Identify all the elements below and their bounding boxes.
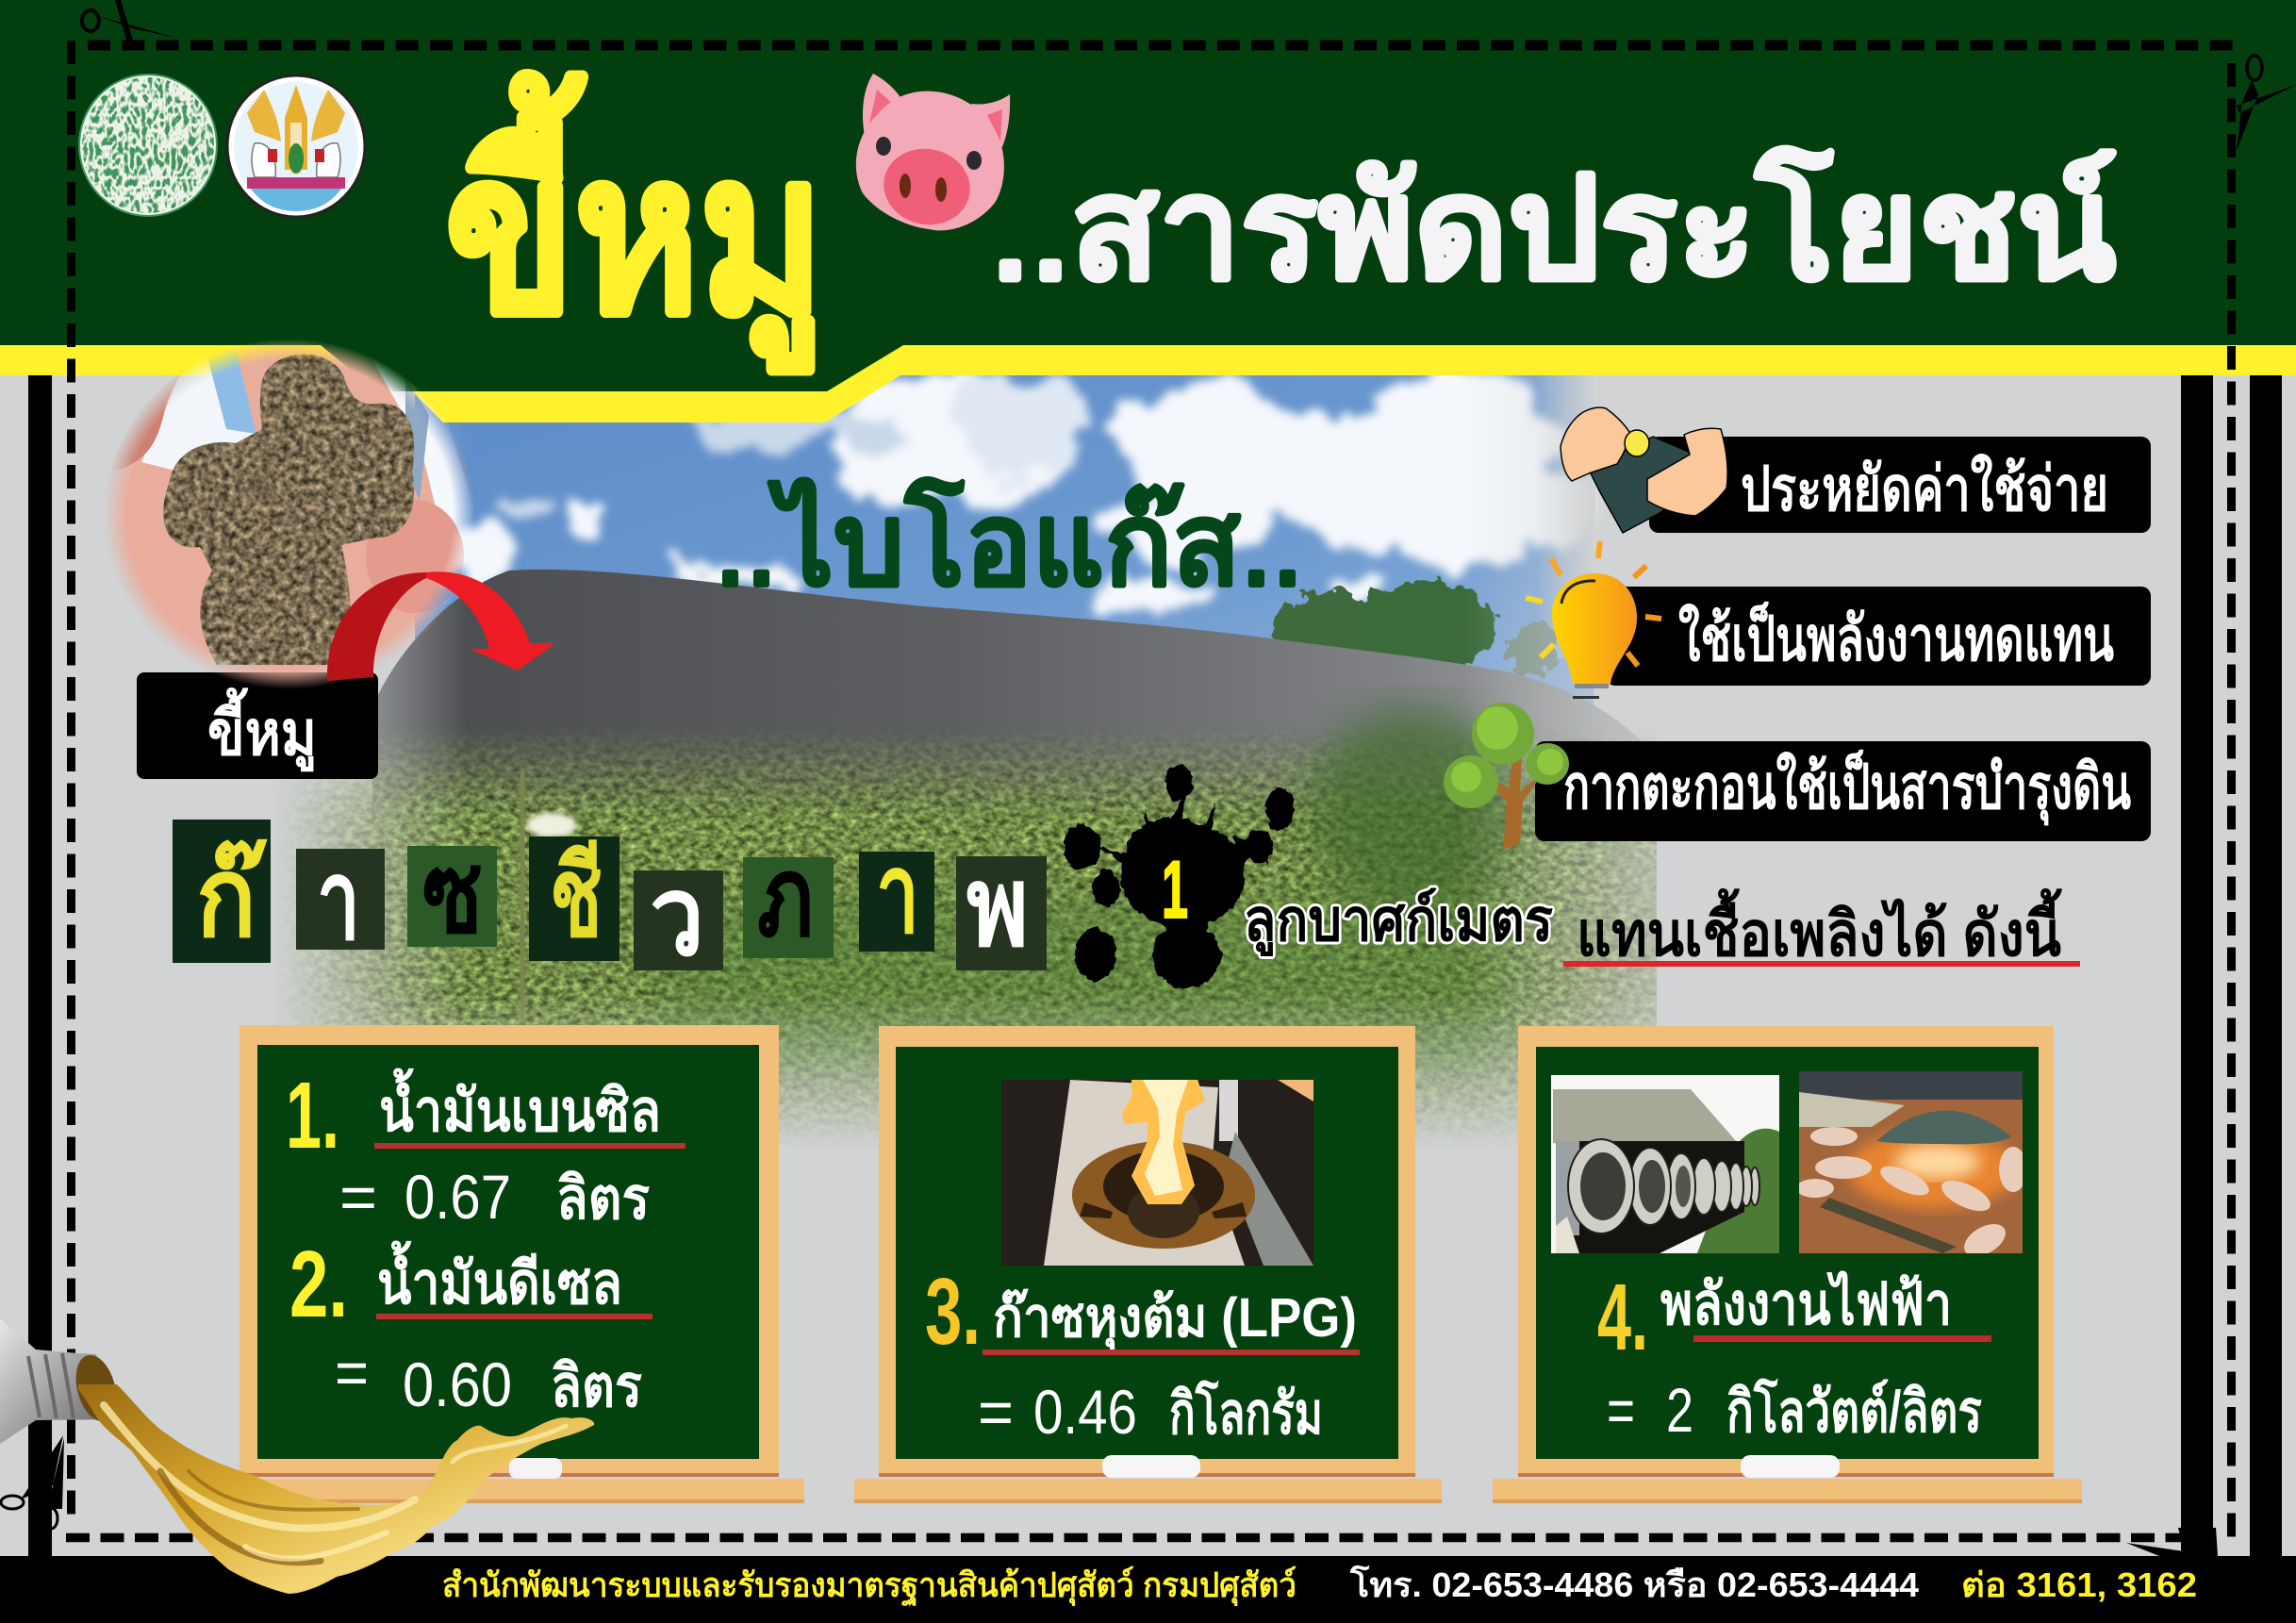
benefit: alternative energy <box>1526 541 2151 699</box>
photo: farm fans <box>1551 1075 1779 1253</box>
tile ภ: ภ <box>757 836 814 960</box>
pill <box>1535 741 2151 841</box>
tile ซ: ซ <box>422 832 483 956</box>
board <box>896 1047 1398 1459</box>
lower grass tone <box>660 896 1509 1085</box>
benefit: save costs <box>1561 407 2151 533</box>
head <box>856 91 1004 230</box>
eyes <box>876 137 891 156</box>
value 2 kW: กิโลวัตต์/ลิตร <box>1726 1377 1982 1445</box>
gasoline: น้ำมันเบนซิล <box>379 1068 661 1144</box>
title: สารพัดประโยชน์: ..สารพัดประโยชน์ <box>990 149 2116 309</box>
sky right fade <box>1544 375 1595 658</box>
value 0.46 <box>978 1377 1323 1447</box>
number 2: 2. <box>289 1232 348 1337</box>
bushes <box>1311 707 1518 915</box>
icon: scissors bottom-right <box>2126 1528 2218 1556</box>
number 1: 1. <box>286 1063 339 1168</box>
value 0.60: 0.60 <box>403 1350 512 1419</box>
LPG label: ก๊าซหุงต้ม (LPG) <box>993 1287 1357 1352</box>
value 0.67: ลิตร <box>556 1167 650 1232</box>
icon: pig face <box>856 74 1010 233</box>
tile พ: พ <box>966 845 1029 969</box>
number: 1 <box>1162 845 1188 936</box>
frame <box>879 1026 1415 1477</box>
number 3: 3. <box>925 1259 981 1365</box>
bottle mouth <box>69 1350 124 1426</box>
value 0.67 <box>339 1162 650 1232</box>
pill <box>1649 437 2151 533</box>
underline <box>374 1143 685 1149</box>
right finger <box>366 500 464 613</box>
phone: โทร. 02-653-4486 หรือ 02-653-4444 <box>1349 1565 1919 1604</box>
chalk <box>1741 1455 1840 1478</box>
tile า: า <box>317 838 360 963</box>
side black bars <box>28 375 2282 1559</box>
seal: livestock department <box>227 75 365 217</box>
text: replaces fuel: แทนเชื้อเพลิงได้ ดังนี้ <box>1577 887 2062 969</box>
board <box>257 1045 759 1459</box>
extension: ต่อ 3161, 3162 <box>1961 1565 2197 1604</box>
photo circle: pig manure in hand <box>104 335 481 689</box>
office name: สำนักพัฒนาระบบและรับรองมาตรฐานสินค้าปศุสัตว์ กรมปศุสัตว์ <box>442 1565 1297 1607</box>
value 0.60: = <box>335 1337 369 1407</box>
oil stream <box>78 1384 594 1594</box>
icon: tree <box>1444 703 1569 849</box>
benefit: soil conditioner <box>1444 703 2151 849</box>
value 0.46: 0.46 <box>1033 1377 1137 1447</box>
chalkboard 1 <box>215 1025 804 1503</box>
trees <box>1275 582 1557 677</box>
value 2 kW: 2 <box>1666 1375 1693 1445</box>
skin <box>104 339 475 689</box>
pill text: ประหยัดค่าใช้จ่าย <box>1741 452 2108 523</box>
background photo: biogas plant under open sky <box>273 373 1657 1151</box>
oil highlights <box>104 1405 566 1563</box>
value 2 kW <box>1607 1375 1982 1445</box>
shelf <box>1493 1479 2082 1503</box>
underline <box>1693 1335 1991 1342</box>
icon: scissors top-left <box>82 0 176 41</box>
left ear <box>863 74 910 141</box>
nostrils <box>900 174 911 198</box>
letter tiles: ก๊าซชีวภาพ <box>173 820 1047 979</box>
flower <box>527 813 576 837</box>
finger shading <box>113 371 185 472</box>
tile ชี: ชี <box>550 836 603 960</box>
frame <box>240 1025 779 1477</box>
chalk <box>509 1458 562 1479</box>
title: ขี้หมู: ขี้หมู <box>445 75 824 370</box>
right ear <box>971 94 1010 156</box>
arrow: red curved <box>327 571 555 681</box>
value 0.60: ลิตร <box>551 1354 642 1419</box>
biogas tank <box>372 570 1641 815</box>
tile ว <box>634 854 723 979</box>
yellow band <box>0 345 2296 422</box>
plant stalk <box>520 769 524 1023</box>
diesel: น้ำมันดีเซล <box>377 1240 622 1317</box>
grass <box>273 726 1657 1151</box>
shelf <box>215 1479 804 1503</box>
subtitle: ไบโอแก๊ส: ..ไบโอแก๊ส.. <box>715 480 1303 610</box>
bottle neck ridges <box>28 1353 74 1418</box>
sky <box>415 375 1594 734</box>
value 0.67: = <box>339 1162 377 1232</box>
green banner <box>0 0 2296 391</box>
icon: scissors bottom-left <box>1 1435 64 1529</box>
value 0.60 <box>335 1337 642 1419</box>
label box: ขี้หมู: ขี้หมู <box>207 687 317 772</box>
value 0.67: 0.67 <box>405 1162 511 1232</box>
shelf <box>854 1479 1442 1503</box>
tile ก๊: ก๊ <box>196 836 268 960</box>
bottle <box>0 1318 117 1444</box>
icon: oil bottle pouring <box>0 1318 594 1594</box>
pill <box>1606 587 2151 686</box>
pill text: ใช้เป็นพลังงานทดแทน <box>1678 601 2114 673</box>
ink splat with number 1 <box>1064 765 1294 988</box>
electricity label: พลังงานไฟฟ้า <box>1660 1270 1952 1337</box>
manure lump <box>163 355 414 665</box>
number 4: 4. <box>1597 1265 1648 1370</box>
board <box>1536 1047 2039 1459</box>
underline <box>983 1350 1360 1355</box>
tile ก๊ <box>173 820 271 963</box>
tile า: า <box>876 832 919 956</box>
rays <box>1526 541 1661 666</box>
chalkboard 3 <box>1493 1026 2082 1503</box>
icon: light bulb <box>1526 541 1661 699</box>
clouds <box>415 373 1594 611</box>
label box: ขี้หมู <box>137 672 378 779</box>
icon: scissors top-right <box>2237 56 2296 151</box>
snout <box>877 141 977 233</box>
tile ว: ว <box>650 854 704 979</box>
value 0.46: กิโลกรัม <box>1169 1379 1323 1447</box>
value 0.46: = <box>978 1377 1014 1447</box>
footer bar <box>0 1556 2296 1623</box>
chalk <box>1102 1455 1200 1478</box>
photo: piglets under heat lamp <box>1796 1071 2027 1263</box>
background top-left <box>141 358 256 470</box>
footer <box>0 1528 2296 1623</box>
icon: hands and wallet <box>1561 407 1727 533</box>
text: ลูกบาศก์เมตร: ลูกบาศก์เมตร <box>1244 887 1553 956</box>
chalkboard 2 <box>854 1026 1442 1503</box>
seal: royal crest green <box>79 75 217 216</box>
photo: gas burner <box>1001 1080 1313 1266</box>
background right <box>372 359 473 604</box>
header banner <box>0 0 2296 422</box>
underline <box>376 1314 652 1319</box>
frame <box>1518 1026 2054 1477</box>
value 2 kW: = <box>1607 1375 1635 1445</box>
